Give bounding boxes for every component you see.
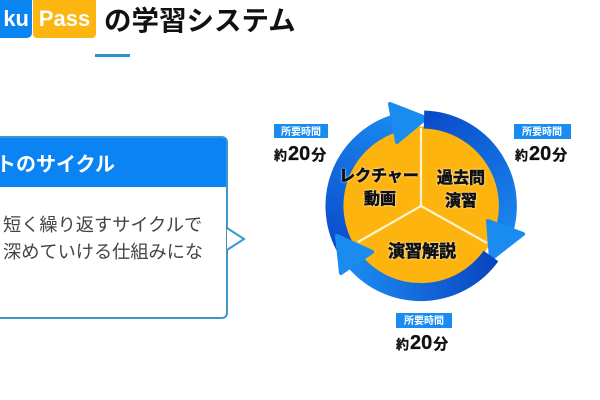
label: lecture video — [339, 167, 419, 208]
logo: ku blue tile: ku — [3, 6, 29, 31]
time tag: bottom: 約20分 — [396, 332, 448, 354]
time tag: bottom: 所要時間 — [404, 314, 444, 327]
card pointer — [227, 228, 246, 250]
ring segment and arrow: left — [334, 104, 426, 249]
ring segment and arrow: bottom — [337, 236, 491, 292]
time tag: right: 約20分 — [515, 143, 567, 165]
card header — [0, 138, 226, 187]
time tag: right: 所要時間 — [522, 125, 562, 138]
panel: cycle explanation card — [0, 136, 228, 319]
label: lecture video: 動画 — [364, 190, 396, 208]
title text: の学習システム — [104, 5, 296, 36]
logo: Pass yellow tile: Pass — [39, 6, 90, 31]
time tag: bottom — [396, 313, 452, 354]
logo: ku blue tile — [0, 0, 32, 38]
label: lecture video: レクチャー — [339, 167, 419, 185]
time tag: right — [514, 124, 571, 165]
logo: Pass yellow tile — [33, 0, 96, 38]
time tag: left: 所要時間 — [281, 125, 321, 138]
label: practice explanation: 演習解説 — [388, 242, 456, 261]
card body text: 深めていける仕組みにな — [3, 242, 203, 262]
heading — [0, 0, 296, 38]
label: past exam practice: 過去問 — [437, 168, 485, 187]
time tag: left: 約20分 — [274, 143, 326, 165]
card body text — [3, 215, 203, 262]
time tag: left — [274, 124, 328, 165]
label: past exam practice — [437, 168, 485, 210]
orange pie — [342, 126, 500, 284]
card body text: 短く繰り返すサイクルで — [3, 215, 202, 235]
ring segment and arrow: right — [424, 120, 523, 259]
label: past exam practice: 演習 — [445, 192, 477, 210]
underline accent — [95, 54, 130, 56]
